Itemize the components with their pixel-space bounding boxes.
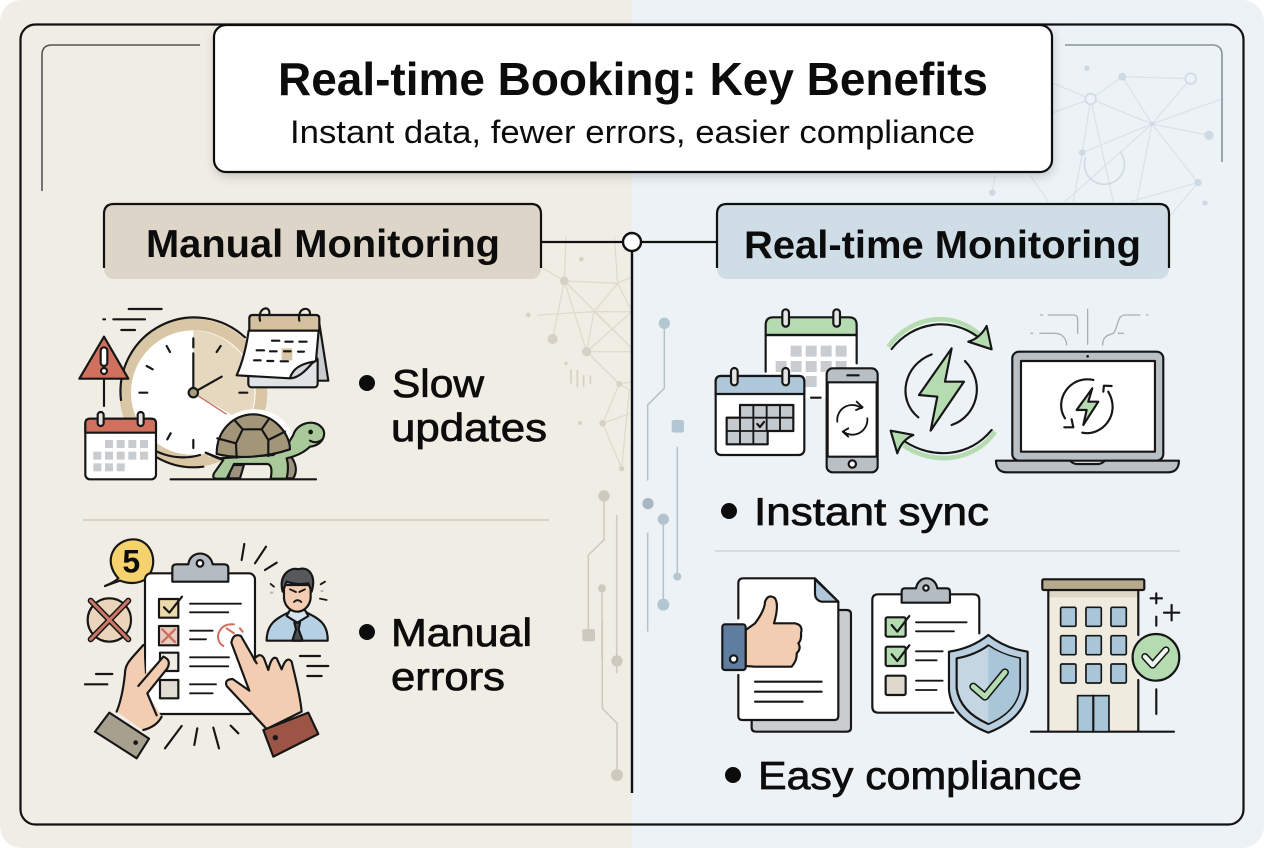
icon: laptop xyxy=(996,309,1179,472)
decoration: right circuit traces xyxy=(642,318,684,632)
icon group: easy compliance xyxy=(722,578,1179,733)
header: Real-time Monitoring: Real-time Monitoring xyxy=(744,224,1141,267)
corner bracket: top right xyxy=(1065,45,1222,162)
icon: frustrated person xyxy=(242,544,328,641)
decoration: top right network xyxy=(989,66,1221,220)
icon: calendar xyxy=(85,412,156,479)
icon: clipboard xyxy=(145,554,255,714)
icon: thumbs up hand xyxy=(722,596,802,670)
icon: left hand xyxy=(95,645,169,758)
icon: pointing hand xyxy=(226,635,318,757)
icon: turtle xyxy=(171,409,324,479)
motion rays xyxy=(85,656,328,748)
icon: shield with check xyxy=(949,635,1028,733)
divider right xyxy=(715,550,1180,552)
icon: sync arrows and lightning xyxy=(888,319,995,458)
icon: building with approval badge xyxy=(1031,579,1179,732)
heading: Real-time Booking: Key Benefits xyxy=(278,53,988,105)
icon: speech bubble count xyxy=(105,539,153,586)
icon: checklist clipboard xyxy=(872,578,979,713)
bullet: Manual errors: errors xyxy=(391,656,505,699)
bullet: Easy compliance: Easy compliance xyxy=(758,755,1082,798)
icon: phone xyxy=(827,368,878,472)
bullet: Slow updates: Slow xyxy=(392,363,485,406)
decoration: left network xyxy=(526,237,632,471)
icon: tear-off calendar xyxy=(237,308,328,387)
icon: front calendar xyxy=(716,368,804,455)
decoration: lower circuit trace xyxy=(602,620,623,781)
icon: crossed circle xyxy=(88,598,131,642)
speed lines xyxy=(103,309,162,330)
icon: approved document xyxy=(722,578,851,732)
header: Manual Monitoring: Manual Monitoring xyxy=(146,223,500,266)
icon: speech bubble count: 5 xyxy=(122,544,140,580)
corner bracket: top left xyxy=(42,45,200,191)
bullet: Slow updates: updates xyxy=(391,407,547,450)
icon group: instant sync across devices xyxy=(716,309,1179,472)
bullet: Manual errors: Manual xyxy=(391,612,532,655)
icon: clock xyxy=(119,317,267,467)
subtitle: Instant data, fewer errors, easier compliance xyxy=(290,114,975,150)
decoration: left circuit traces xyxy=(582,490,623,673)
bullet: Manual errors xyxy=(359,612,532,699)
bullet: Slow updates xyxy=(359,363,547,450)
connector between column headers xyxy=(541,233,717,793)
icon: warning triangle xyxy=(79,337,128,406)
header: Real-time Monitoring xyxy=(717,204,1169,279)
divider left xyxy=(83,519,549,521)
icon group: clipboard with manual errors xyxy=(85,539,328,758)
bullet: Instant sync: Instant sync xyxy=(754,491,989,534)
icon group: clock, calendars, warning and turtle xyxy=(79,308,328,479)
header: Manual Monitoring xyxy=(104,204,541,279)
icon: back calendar xyxy=(766,309,857,398)
title panel xyxy=(214,25,1052,172)
